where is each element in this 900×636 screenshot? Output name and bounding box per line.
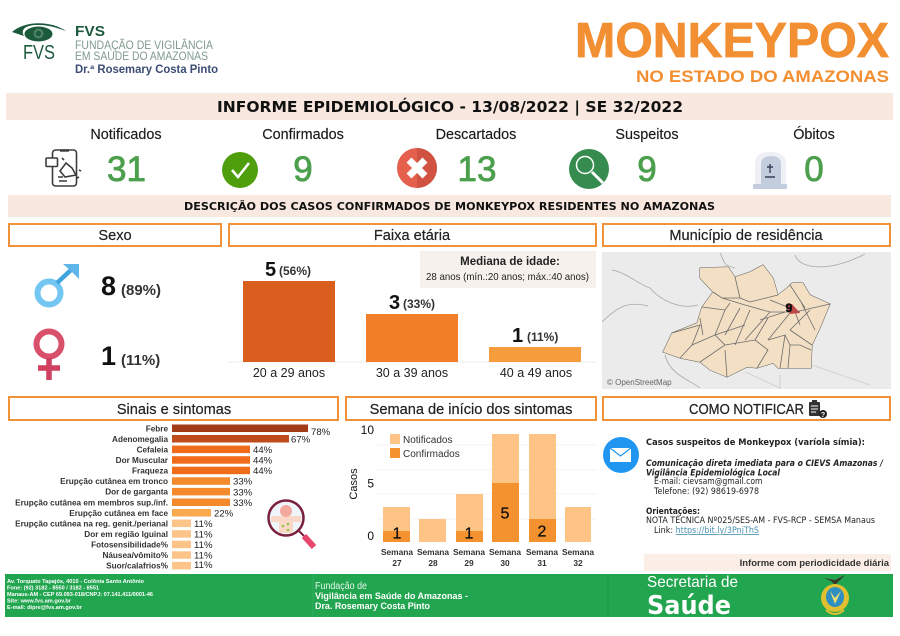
icon: clipboard question: [809, 400, 827, 419]
note: periodicidade: Informe com periodicidade diária: [740, 558, 890, 569]
icon: eye: [12, 23, 66, 42]
male count: (89%): [121, 282, 161, 299]
heading: município: Município de residência: [669, 228, 824, 244]
stacked bar chart: semanas: 28: [428, 558, 438, 568]
kpi: descartados: Descartados: [436, 127, 516, 143]
stacked bar chart: semanas: 1: [393, 526, 402, 542]
stacked bar chart: semanas: Semana: [489, 547, 521, 557]
kpi: descartados: 13: [458, 150, 496, 189]
stacked bar chart: semanas: Semana: [526, 547, 558, 557]
bar chart: sintomas: Fotosensibilidade%: [91, 541, 169, 550]
bar chart: faixa etária: (56%): [279, 264, 311, 278]
stacked bar chart: semanas: 5: [501, 506, 510, 522]
icon: female: [36, 332, 62, 380]
bar chart: sintomas: 11%: [194, 519, 213, 530]
footer institution: [315, 581, 468, 612]
icon: envelope: [603, 437, 639, 473]
bar chart: sintomas: 33%: [233, 498, 253, 509]
stacked bar chart: semanas: 31: [537, 558, 547, 568]
male count: 8: [101, 271, 116, 301]
bar chart: sintomas: 44%: [253, 456, 273, 467]
bar chart: sintomas: Adenomegalia: [112, 435, 168, 444]
kpi: notificados: Notificados: [90, 127, 162, 143]
map: highlighted municipality: [786, 304, 800, 314]
bar chart: sintomas: Cefaleia: [137, 445, 168, 454]
footer secretaria: [647, 574, 738, 621]
stacked bar chart: semanas: Semana: [562, 547, 594, 557]
stacked bar chart: semanas: 29: [464, 558, 474, 568]
panel: sinais e sintomas: [9, 397, 338, 571]
bar chart: sintomas: 11%: [194, 560, 213, 571]
heading: sexo: [9, 224, 221, 246]
bar chart: sintomas: [15, 424, 331, 571]
heading: como notificar: COMO NOTIFICAR: [689, 402, 804, 418]
footer address: E-mail: dipre@fvs.am.gov.br: [7, 605, 83, 611]
stacked bar chart: semanas: Semana: [453, 547, 485, 557]
text block: contato: Vigilância Epidemiológica Local: [646, 468, 780, 478]
heading: faixa etária: [229, 224, 596, 246]
footer institution: Vigilância em Saúde do Amazonas -: [315, 591, 468, 602]
stacked bar chart: semanas: 30: [500, 558, 510, 568]
female count: 1: [101, 341, 116, 371]
kpi: óbitos: [753, 126, 835, 189]
bar chart: sintomas: Dor de garganta: [105, 488, 168, 497]
stacked bar chart: semanas: 1: [465, 526, 474, 542]
logo: FVS: FUNDAÇÃO DE VIGILÂNCIA: [75, 39, 213, 52]
bar chart: sintomas: 33%: [233, 477, 253, 488]
stacked bar chart: semanas: 27: [392, 558, 402, 568]
kpi: confirmados: Confirmados: [262, 127, 344, 143]
kpi: óbitos: 0: [804, 150, 824, 189]
bar chart: faixa etária: 20 a 29 anos: [253, 366, 325, 380]
bar chart: sintomas: Suor/calafrios%: [106, 562, 169, 571]
heading: município: [603, 224, 890, 246]
logo: FVS: FVS: [23, 42, 55, 64]
icon: male: [38, 264, 79, 304]
bar chart: faixa etária: [228, 259, 597, 380]
kpi: descartados: [397, 127, 516, 189]
bar chart: sintomas: Erupção cutânea em membros sup./inf.: [15, 498, 168, 507]
bar chart: faixa etária: 30 a 39 anos: [376, 366, 448, 380]
map: value marker: 9: [786, 301, 793, 315]
bar chart: faixa etária: 5: [265, 259, 276, 281]
bar chart: sintomas: 44%: [253, 445, 273, 456]
text block: contato: [646, 437, 884, 535]
heading: faixa etária: Faixa etária: [374, 228, 451, 244]
female count: (11%): [121, 352, 160, 369]
callout: mediana de idade: 28 anos (mín.:20 anos; máx.:40 anos): [426, 271, 589, 283]
text block: contato: Telefone: (92) 98619-6978: [653, 486, 759, 496]
footer address: Site: www.fvs.am.gov.br: [7, 598, 72, 604]
note: periodicidade: [644, 554, 891, 571]
kpi: suspeitos: Suspeitos: [615, 127, 679, 143]
title: MONKEYPOX: [575, 14, 889, 68]
map: amazonas: [602, 252, 891, 389]
bar chart: sintomas: 11%: [194, 540, 213, 551]
map: amazonas: © OpenStreetMap: [607, 378, 672, 387]
heading: como notificar: [603, 397, 890, 420]
callout: mediana de idade: Mediana de idade:: [460, 256, 560, 268]
bar chart: faixa etária: (11%): [527, 330, 558, 344]
panel: como notificar: [603, 397, 891, 571]
heading: sexo: Sexo: [98, 228, 132, 244]
panel: município de residência: [602, 224, 891, 389]
female count: [101, 341, 160, 371]
logo: FVS: Dr.ª Rosemary Costa Pinto: [75, 64, 218, 76]
legend: Confirmados: [403, 449, 460, 460]
heading: sinais e sintomas: Sinais e sintomas: [117, 402, 231, 418]
stacked bar chart: semanas: Semana: [417, 547, 449, 557]
text block: contato: Casos suspeitos de Monkeypox (varíola símia):: [646, 437, 865, 447]
footer address: Fone: (92) 3182 - 8550 / 3182 - 8551: [7, 586, 99, 592]
logo: FVS: FVS: [75, 23, 105, 40]
stacked bar chart: semanas: [348, 423, 597, 568]
bar chart: sintomas: 22%: [214, 508, 234, 519]
callout: mediana de idade: [420, 251, 596, 288]
legend: [390, 434, 460, 460]
kpi: notificados: [46, 127, 162, 189]
bar chart: sintomas: Dor Muscular: [116, 456, 169, 465]
bar chart: sintomas: 11%: [194, 530, 213, 540]
bar chart: sintomas: 67%: [291, 434, 311, 446]
map: municipal borders: [672, 277, 830, 377]
logo: FVS: EM SAÚDE DO AMAZONAS: [75, 50, 208, 63]
text block: contato: E-mail: cievsam@gmail.com: [654, 476, 762, 486]
kpi: óbitos: Óbitos: [793, 126, 835, 143]
icon: phone with bell: [46, 150, 81, 186]
kpi: suspeitos: [569, 127, 679, 189]
kpi: notificados: 31: [107, 150, 146, 189]
icon: tombstone: [753, 152, 787, 189]
bar chart: sintomas: Erupção cutânea na reg. genit./perianal: [15, 519, 168, 528]
footer address: Av. Torquato Tapajós, 4010 - Colônia Santo Antônio: [7, 579, 145, 585]
panel: sexo: [9, 224, 221, 380]
panel: semana de início dos sintomas: [346, 397, 597, 568]
stacked bar chart: semanas: 2: [538, 524, 547, 540]
stacked bar chart: semanas: 32: [573, 558, 583, 568]
footer address: [7, 579, 153, 611]
icon: magnifier: [569, 149, 609, 189]
footer secretaria: Saúde: [647, 591, 731, 621]
text block: contato: Link: https://bit.ly/3PnjThS: [654, 525, 759, 535]
footer address: Manaus-AM - CEP 69.093-018/CNPJ: 07.141.411/0001-46: [7, 592, 153, 598]
male count: [101, 271, 161, 301]
bar chart: sintomas: 33%: [233, 487, 253, 498]
bar chart: sintomas: 44%: [253, 466, 273, 477]
icon: coat of arms: [821, 575, 849, 614]
kpi: confirmados: 9: [293, 150, 313, 189]
bar chart: sintomas: Dor em região Iguinal: [84, 530, 168, 539]
kpi: suspeitos: 9: [637, 150, 657, 189]
bar chart: sintomas: Fraqueza: [132, 467, 168, 476]
icon: check: [222, 152, 258, 188]
bar chart: sintomas: Febre: [146, 424, 168, 433]
legend: Notificados: [403, 435, 452, 446]
bar chart: sintomas: Náusea/vômito%: [102, 551, 169, 560]
icon: clipboard question: ?: [821, 412, 825, 419]
stacked bar chart: semanas: 0: [367, 529, 374, 543]
stacked bar chart: semanas: 5: [367, 476, 374, 490]
footer secretaria: Secretaria de: [647, 574, 738, 591]
text block: contato: NOTA TÉCNICA Nº025/SES-AM - FVS-RCP - SEMSA Manaus: [646, 514, 875, 525]
stacked bar chart: semanas: Semana: [381, 547, 413, 557]
heading: informe epidemiológico: [6, 93, 893, 120]
heading: sinais e sintomas: [9, 397, 338, 420]
stacked bar chart: semanas: 10: [361, 423, 374, 437]
stacked bar chart: semanas: Casos: [348, 468, 360, 500]
heading: descrição dos casos: [8, 195, 891, 217]
bar chart: sintomas: Erupção cutânea em face: [69, 509, 168, 518]
footer: [5, 574, 893, 621]
bar chart: faixa etária: 40 a 49 anos: [500, 366, 572, 380]
panel: faixa etária: [228, 224, 597, 380]
logo: FVS: [12, 23, 218, 76]
kpi: confirmados: [222, 127, 344, 189]
bar chart: faixa etária: 3: [389, 292, 400, 314]
map: state outline: [663, 265, 830, 377]
text block: contato: Orientações:: [646, 506, 700, 516]
icon: skin magnifier: [268, 500, 314, 547]
heading: descrição dos casos: DESCRIÇÃO DOS CASOS CONFIRMADOS DE MONKEYPOX RESIDENTES NO AMAZONAS: [184, 200, 715, 213]
bar chart: sintomas: 11%: [194, 550, 213, 562]
bar chart: sintomas: 78%: [311, 427, 331, 438]
footer institution: Dra. Rosemary Costa Pinto: [315, 601, 430, 612]
heading: informe epidemiológico: INFORME EPIDEMIOLÓGICO - 13/08/2022 | SE 32/2022: [217, 97, 683, 117]
text block: contato: Comunicação direta imediata para o CIEVS Amazonas /: [646, 458, 884, 468]
bar chart: sintomas: Erupção cutânea em tronco: [60, 477, 168, 486]
icon: cross: [397, 148, 437, 188]
bar chart: faixa etária: (33%): [403, 297, 435, 311]
footer institution: Fundação de: [315, 581, 367, 592]
heading: semana: Semana de início dos sintomas: [370, 402, 572, 418]
bar chart: faixa etária: 1: [512, 325, 523, 347]
heading: semana: [346, 397, 596, 420]
title: NO ESTADO DO AMAZONAS: [636, 68, 889, 86]
